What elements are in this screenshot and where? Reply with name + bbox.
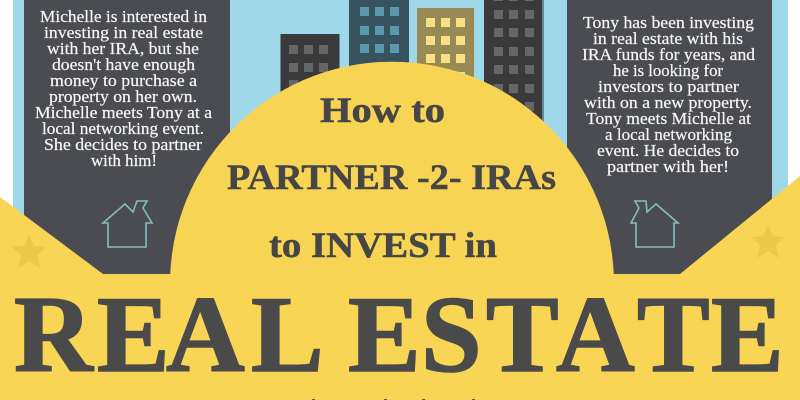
sky background [13,0,788,300]
text block: Tony story: in real estate with his [593,29,743,48]
text block: Tony story: investors to partner [598,77,740,96]
text block: Michelle story: Michelle is interested in [40,7,207,26]
text block: Tony story: with on a new property. [584,93,752,112]
text block: Michelle story: with him! [91,151,157,170]
text block: Tony story: a local networking [605,125,732,144]
yellow ground with angled corners [0,176,800,400]
title: REAL ESTATE: REAL ESTATE [0,274,784,395]
text block: Michelle story: local networking event. [42,119,204,138]
text block: Tony story: partner with her! [607,157,729,176]
building: olive [417,8,474,128]
heading: to INVEST in: to INVEST in [269,225,497,265]
icon: right house [631,201,678,247]
heading: How to: How to [320,90,445,130]
text block: Michelle story [35,7,213,170]
text block: Michelle story: with her IRA, but she [47,39,199,58]
icon: right star [751,225,785,258]
text block: Tony story: Tony has been investing [583,13,754,32]
text block: Tony story: Tony meets Michelle at [586,109,751,128]
heading: PARTNER -2- IRAs: PARTNER -2- IRAs [227,157,556,197]
text block: Michelle story: She decides to partner [44,135,203,154]
text block: Michelle story: money to purchase a [50,71,198,90]
panel: Michelle background [24,0,230,274]
text block: Tony story: he is looking for [613,61,723,80]
text block: Michelle story: Michelle meets Tony at a [35,103,213,122]
text block: Tony story: IRA funds for years, and [582,45,756,64]
building: dark left [280,34,340,154]
yellow hill: central dome [170,62,614,300]
building: dark right [484,0,544,140]
text block: Michelle story: property on her own. [49,87,197,106]
text block: Tony story: event. He decides to [597,141,739,160]
building: teal [349,0,409,120]
icon: left house [103,201,152,247]
cut-off text at the bottom edge [312,399,475,400]
text block: Michelle story: doesn't have enough [52,55,196,74]
icon: left star [12,235,46,268]
text block: Tony story [582,13,756,176]
text block: Michelle story: investing in real estate [44,23,203,42]
panel: Tony background [567,0,772,274]
